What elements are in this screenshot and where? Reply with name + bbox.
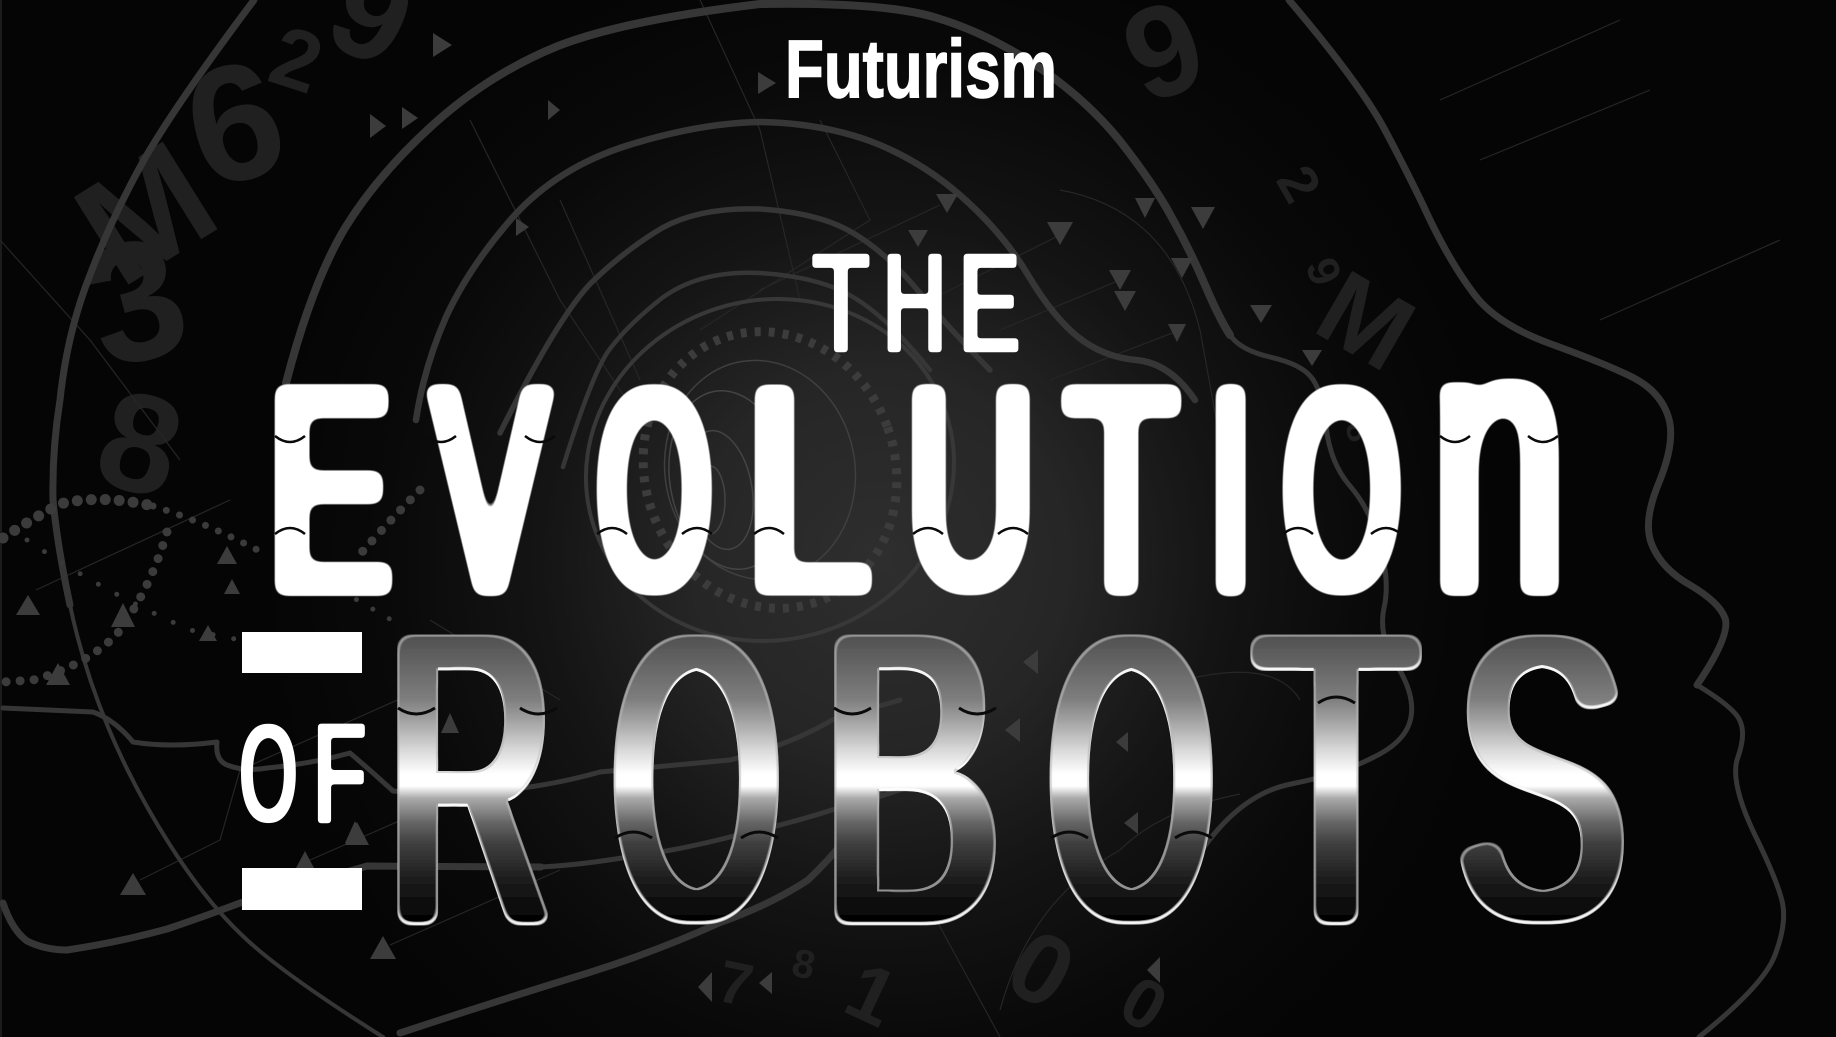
title word: THE: [813, 225, 1020, 380]
central ring and inner swirls: [547, 258, 993, 682]
title word: THE: E: [959, 225, 1020, 380]
title word: EVOLUTION: V: [433, 327, 547, 652]
title word: EVOLUTION: O: [598, 334, 711, 647]
faint tilted digits: 8: [788, 941, 819, 988]
title word: EVOLUTION: L: [746, 327, 870, 652]
logo: Futurism: Futurism: [785, 24, 1057, 115]
title word: THE: H: [883, 226, 946, 380]
title word: ROBOTS in chrome gradient: R: [389, 547, 552, 1011]
faint tilted digits: 0: [989, 907, 1093, 1032]
small triangle markers: [16, 33, 1322, 1002]
title word: EVOLUTION: E: [268, 327, 391, 652]
faint tilted digits: M: [1298, 249, 1433, 394]
title word: ROBOTS in chrome gradient: B: [822, 546, 1000, 1011]
side bar: top: [242, 632, 362, 673]
title word: ROBOTS in chrome gradient: O: [1049, 555, 1213, 1005]
title word: ROBOTS in chrome gradient: [389, 546, 1626, 1012]
faint tilted digits: 9: [1296, 251, 1352, 292]
title word: EVOLUTION: [268, 244, 1566, 671]
faint tilted digits: 2: [1265, 155, 1334, 212]
faint tilted digits: 8: [82, 357, 198, 529]
faint tilted digits: [48, 0, 1433, 1037]
faint tilted digits: 7: [712, 947, 759, 1020]
dotted arcs at left: [3, 490, 420, 682]
title word: THE: T: [813, 226, 869, 380]
title word: ROBOTS in chrome gradient: O: [613, 555, 779, 1004]
title word: ROBOTS in chrome gradient: S: [1457, 555, 1626, 1004]
title word: OF: F: [314, 695, 366, 852]
faint tilted digits: 8: [1337, 417, 1380, 446]
title word: EVOLUTION: n: [1432, 244, 1566, 671]
faint tilted digits: 3: [65, 198, 206, 406]
title word: EVOLUTION: T: [1066, 329, 1177, 652]
faint tilted digits: 2: [259, 8, 333, 113]
title word: EVOLUTION: U: [907, 329, 1035, 648]
faint tilted digits: 6: [166, 22, 303, 224]
title word: OF: O: [240, 699, 297, 850]
side bar: bottom: [242, 868, 362, 910]
title word: EVOLUTION: I: [1210, 327, 1251, 652]
title word: ROBOTS in chrome gradient: T: [1254, 547, 1418, 1012]
title word: OF: [240, 695, 366, 852]
title word: EVOLUTION: O: [1284, 332, 1400, 647]
faint tilted digits: M: [48, 108, 243, 317]
